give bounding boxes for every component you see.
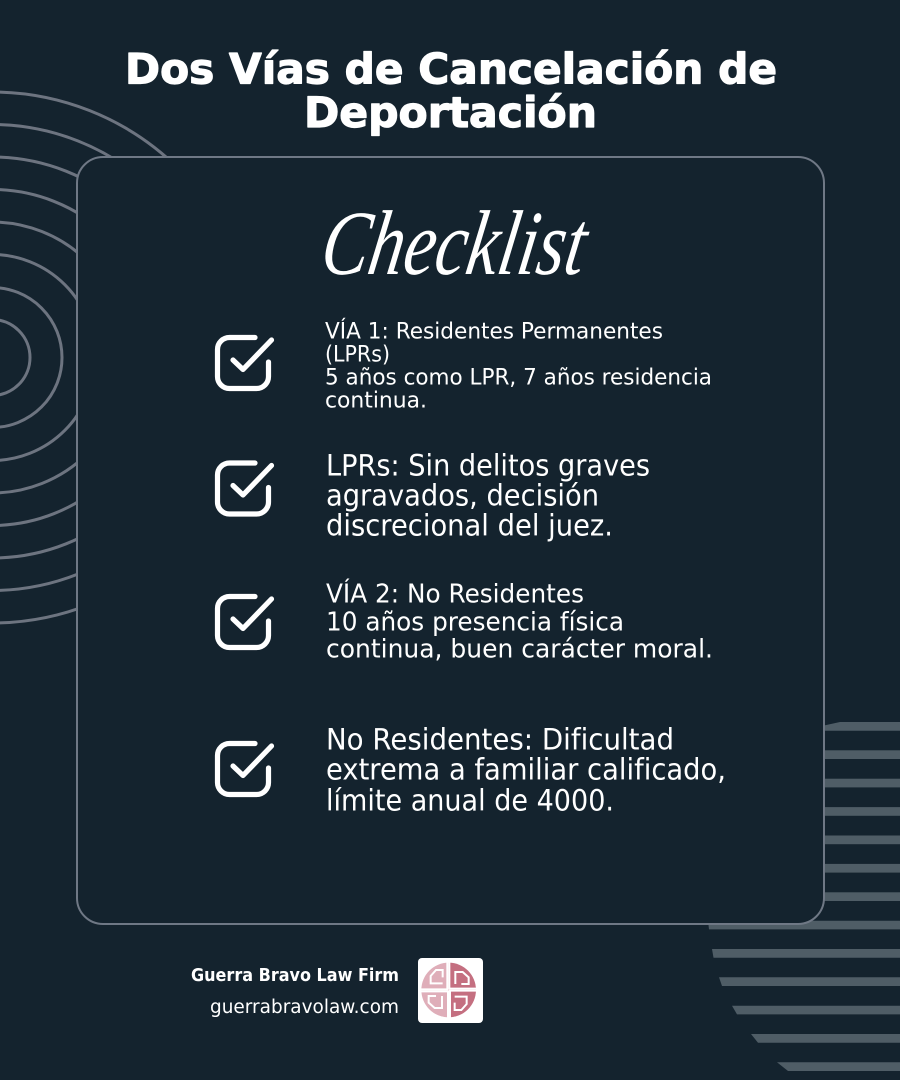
text: item 3: 10 años presencia física bbox=[326, 608, 624, 638]
text: item 4 bbox=[326, 722, 726, 818]
heading: Checklist: Checklist bbox=[315, 193, 596, 295]
panel: checklist bbox=[77, 157, 824, 924]
text: item 1: VÍA 1: Residentes Permanentes bbox=[325, 318, 663, 344]
text: item 2: agravados, decisión bbox=[326, 478, 599, 512]
text: item 2: LPRs: Sin delitos graves bbox=[326, 448, 650, 482]
title: Deportación bbox=[304, 88, 597, 137]
text: item 1 bbox=[325, 318, 712, 414]
text: item 4: No Residentes: Dificultad bbox=[326, 722, 674, 756]
text: item 3: continua, buen carácter moral. bbox=[326, 634, 713, 664]
text: item 1: continua. bbox=[325, 388, 427, 414]
logo bbox=[418, 958, 483, 1023]
text: item 2: discrecional del juez. bbox=[326, 508, 613, 542]
footer: firm name and website bbox=[191, 966, 399, 1018]
decorative concentric circles bbox=[0, 92, 258, 623]
text: item 1: 5 años como LPR, 7 años residencia bbox=[325, 366, 712, 390]
text: item 4: extrema a familiar calificado, bbox=[326, 752, 726, 786]
footer: firm name and website: guerrabravolaw.com bbox=[210, 997, 399, 1018]
decorative stripes bbox=[708, 722, 900, 1071]
title bbox=[125, 44, 777, 137]
icon: checkbox 3 bbox=[218, 596, 272, 648]
text: item 3: VÍA 2: No Residentes bbox=[326, 580, 584, 610]
text: item 2 bbox=[326, 448, 650, 542]
footer: firm name and website: Guerra Bravo Law Firm bbox=[191, 966, 399, 986]
icon: checkbox 4 bbox=[218, 744, 272, 794]
icon: checkbox 1 bbox=[218, 338, 272, 388]
icon: checkbox 2 bbox=[218, 463, 272, 514]
text: item 1: (LPRs) bbox=[325, 342, 390, 368]
title: Dos Vías de Cancelación de bbox=[125, 44, 777, 94]
text: item 3 bbox=[326, 580, 713, 664]
text: item 4: límite anual de 4000. bbox=[326, 784, 614, 818]
